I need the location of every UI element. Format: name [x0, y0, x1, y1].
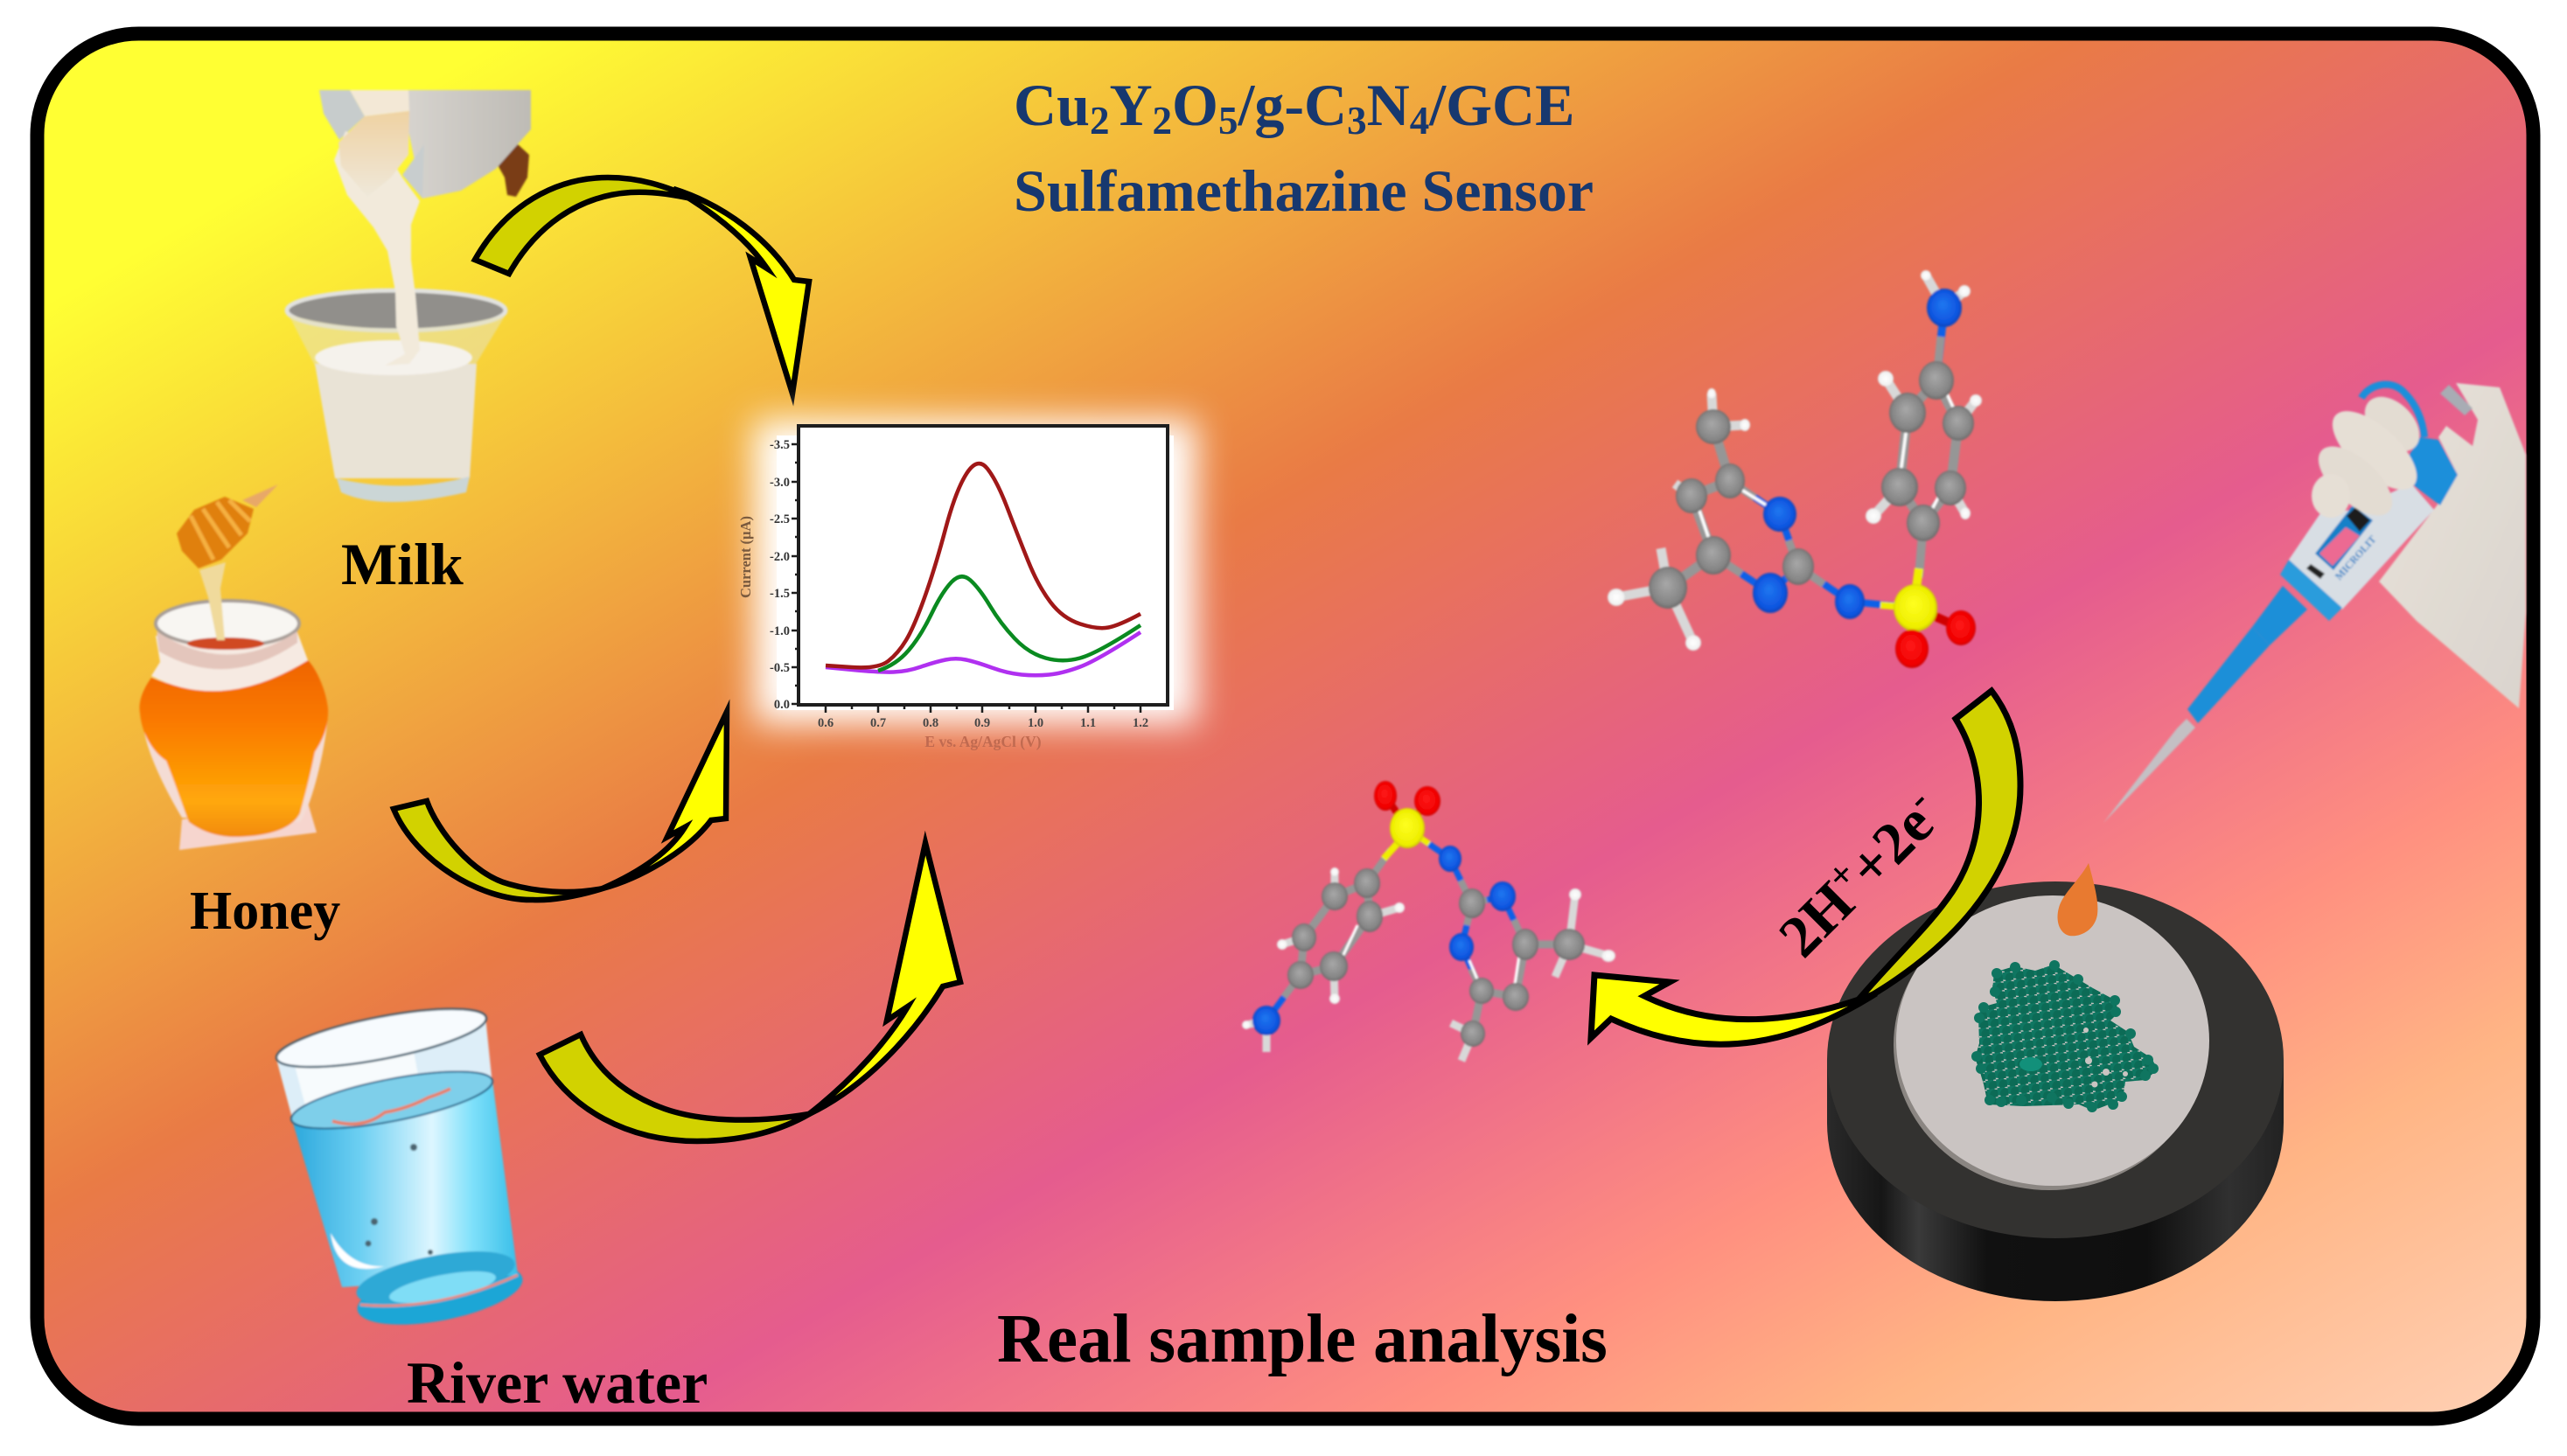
jar collar [151, 632, 308, 691]
honey drip [199, 562, 226, 640]
neck band [157, 631, 297, 669]
base [352, 1252, 527, 1336]
glass upper wall [289, 315, 506, 366]
plunger top [2440, 385, 2473, 415]
jug lip [319, 90, 365, 140]
arrow head [809, 843, 960, 1114]
catalyst edge beads [1971, 960, 2159, 1112]
y tick labels: -3.0 [770, 476, 790, 490]
display frame [2315, 505, 2373, 570]
chart: differential pulse voltammogram [737, 420, 1196, 750]
chart white core [777, 435, 1174, 710]
dipper handle [242, 484, 278, 507]
arrow: milk to chart [475, 178, 809, 394]
arrow tail [475, 178, 695, 274]
x tick labels: 0.6 [818, 716, 834, 730]
display black cap [2347, 507, 2370, 532]
y tick labels [770, 438, 790, 712]
y tick labels: 0.0 [774, 698, 790, 712]
inner glass highlight [331, 1233, 385, 1269]
jug cream interior [350, 90, 409, 116]
jug handle [497, 144, 529, 197]
jug body [408, 90, 531, 199]
milk surface [315, 340, 472, 375]
milk in glass [315, 364, 477, 478]
pipette shaft collar [2252, 586, 2307, 645]
y tick labels: -1.5 [770, 587, 790, 601]
x ticks [826, 705, 1141, 713]
molecule: oxidised product (bottom) [1242, 781, 1615, 1061]
display window [2319, 527, 2360, 566]
bonds [1616, 275, 1976, 649]
title: sensor formula: 4 [1410, 99, 1429, 143]
title: sensor formula: /g-C [1237, 72, 1347, 138]
jar body [140, 660, 328, 837]
catalyst bright patch [2019, 1057, 2042, 1071]
title: sensor formula: N [1367, 72, 1410, 138]
arrow tail [540, 1035, 809, 1141]
glove wrist [2379, 383, 2526, 708]
title: sensor formula: 2 [1153, 99, 1172, 143]
water body [292, 1080, 518, 1287]
honey in neck [187, 637, 264, 650]
bubbles [366, 1144, 433, 1255]
y tick labels: -2.0 [770, 550, 790, 564]
icon: glass of river water [273, 997, 527, 1336]
y axis title: Current (µA) [737, 516, 754, 598]
heading: real sample analysis: Real sample analysis [997, 1301, 1608, 1377]
dipper head [177, 497, 254, 568]
pipette narrow shaft [2187, 627, 2270, 723]
y tick labels: -1.0 [770, 624, 790, 638]
arrow tail [1853, 691, 2020, 1006]
body blue collar [2280, 560, 2342, 621]
glass upper [276, 1016, 492, 1125]
title: sensor formula: /GCE [1428, 72, 1574, 138]
arrow head [673, 189, 809, 394]
paper under jar [179, 803, 317, 850]
title: sensor formula: O [1172, 72, 1218, 138]
plunger hook [2361, 385, 2424, 437]
base highlight [387, 1264, 499, 1310]
base rim line [360, 1275, 518, 1306]
arrow head [603, 712, 727, 888]
water surface [288, 1060, 496, 1140]
catalyst gaps [2083, 1028, 2128, 1088]
label: Honey: Honey [190, 881, 340, 941]
x tick labels: 0.8 [923, 716, 938, 730]
red curve [826, 463, 1141, 667]
x tick labels: 0.9 [974, 716, 990, 730]
base inner [352, 1241, 519, 1316]
green curve [878, 576, 1141, 671]
x tick labels: 0.7 [870, 716, 886, 730]
y tick labels: -0.5 [770, 661, 790, 675]
label: Milk: Milk [341, 531, 464, 597]
atoms [1921, 270, 1931, 281]
pipette body [2289, 484, 2434, 610]
title: sensor formula: Y [1109, 72, 1153, 138]
label: 2H+ + 2e-: +2e [1835, 790, 1946, 900]
body button [2306, 564, 2325, 579]
x tick labels: 1.0 [1028, 716, 1043, 730]
label: River water: River water [407, 1349, 708, 1416]
y tick labels: -3.5 [770, 438, 790, 452]
title: sensor formula: 3 [1347, 99, 1367, 143]
arrow tail [394, 801, 603, 900]
electrode side wall [1827, 1060, 2284, 1301]
arrow head [1591, 975, 1876, 1044]
jar glass sides [144, 714, 328, 822]
icon: micropipette in gloved hand [2103, 383, 2526, 823]
x axis title: E vs. Ag/AgCl (V) [924, 733, 1042, 750]
jar rim [156, 601, 299, 646]
gloved finger 2 [2319, 398, 2430, 503]
arrow: river water to chart [540, 843, 960, 1141]
title: sensor formula: Cu [1014, 72, 1090, 138]
title: sensor formula: 2 [1090, 99, 1109, 143]
icon: honey jar with dipper [140, 484, 328, 850]
pipette tip [2103, 719, 2195, 823]
purple curve [826, 632, 1141, 675]
jug spout [402, 144, 424, 199]
atoms [1374, 781, 1397, 811]
chart glow backing [754, 420, 1196, 724]
icon: milk pouring into glass [287, 90, 531, 502]
milk stream [334, 131, 420, 366]
surface ripple [332, 1089, 450, 1124]
plot frame [799, 426, 1168, 705]
label: 2H+ + 2e-: - [1897, 779, 1936, 819]
x tick labels [818, 716, 1148, 730]
y ticks [792, 444, 799, 704]
electrode with catalyst [1827, 863, 2284, 1301]
x tick labels: 1.1 [1080, 716, 1096, 730]
gloved finger 1 [2354, 387, 2430, 462]
electrode disc rim [1894, 900, 2205, 1190]
gloved finger 4 [2312, 474, 2350, 518]
bonds [1246, 796, 1608, 1061]
brand text: MICROLIT [2333, 533, 2379, 582]
catalyst particles [1975, 965, 2158, 1111]
glass base [337, 477, 470, 502]
arrow: honey to chart [394, 712, 727, 900]
gloved finger 3 [2307, 435, 2403, 527]
electrode top face [1827, 881, 2284, 1238]
glass back interior [287, 290, 506, 331]
molecule: sulfamethazine (top) [1608, 270, 1982, 668]
arrow: oxidation reaction [1591, 691, 2020, 1044]
x tick labels: 1.2 [1133, 716, 1148, 730]
dipper stripes [191, 500, 250, 560]
title: sensor formula: 5 [1218, 99, 1238, 143]
y tick labels: -2.5 [770, 512, 790, 526]
sample drop [2057, 863, 2097, 936]
cream top of stream [338, 111, 409, 197]
glass rim [273, 997, 490, 1079]
pipette head [2408, 437, 2458, 505]
label: 2H+ + 2e-: + [1818, 852, 1864, 898]
title: sensor name: Sulfamethazine Sensor [1014, 157, 1594, 224]
electrode disc surface [1896, 895, 2209, 1186]
glass left highlight [294, 1037, 420, 1109]
label: 2H+ + 2e-: 2H [1766, 868, 1866, 970]
